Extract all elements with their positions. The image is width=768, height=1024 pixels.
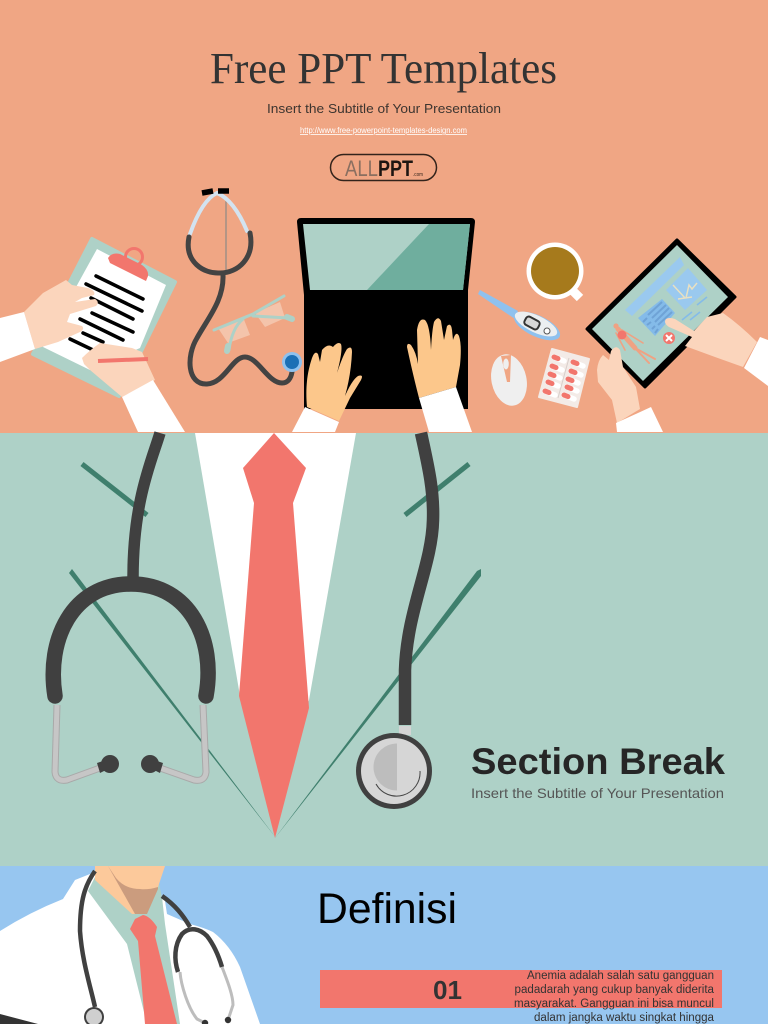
panel: definisi: [0, 866, 768, 1024]
title: Free PPT Templates: [210, 44, 557, 93]
number 01: 01: [433, 975, 462, 1005]
red bar: [320, 970, 722, 1008]
section heading: Section Break: [471, 741, 725, 782]
icon: pill blister: [539, 349, 589, 407]
definition text: masyarakat. Gangguan ini bisa muncul: [514, 998, 714, 1010]
icon: stethoscope chest piece: [356, 433, 433, 809]
icon: coffee cup: [526, 242, 584, 300]
definition text: Anemia adalah salah satu gangguan: [527, 970, 714, 982]
icon: stethoscope earpieces: [53, 433, 208, 780]
icon: desk stethoscope: [188, 191, 302, 384]
panel: title slide: [0, 0, 768, 433]
definition text: padadarah yang cukup banyak diderita: [514, 984, 715, 996]
definition text: [514, 970, 715, 1024]
subtitle: Insert the Subtitle of Your Presentation: [267, 101, 501, 116]
icon: thermometer: [478, 290, 564, 346]
logo: ALLPPT: ALL: [345, 156, 378, 181]
logo: ALLPPT: .com: [413, 172, 423, 178]
panel: section break: [0, 433, 768, 866]
icon: laptop: [297, 218, 475, 409]
section subtitle: Insert the Subtitle of Your Presentation: [471, 785, 724, 801]
shirt: [195, 433, 356, 800]
definition text: dalam jangka waktu singkat hingga: [534, 1012, 715, 1024]
lapel lines: [69, 464, 481, 838]
tie: [239, 433, 309, 838]
icon: mouse: [486, 351, 532, 409]
hands on keyboard: [292, 318, 472, 432]
clipboard with hands: [0, 239, 185, 432]
logo: ALLPPT: PPT: [378, 156, 413, 181]
icon: tablet with medical chart: [587, 240, 735, 387]
hands holding tablet: [597, 313, 768, 432]
website link: http://www.free-powerpoint-templates-design.com: [300, 126, 467, 135]
logo: ALLPPT: [330, 154, 436, 181]
heading: Definisi: [317, 885, 457, 933]
icon: glasses: [214, 296, 292, 351]
doctor illustration: [0, 866, 260, 1024]
